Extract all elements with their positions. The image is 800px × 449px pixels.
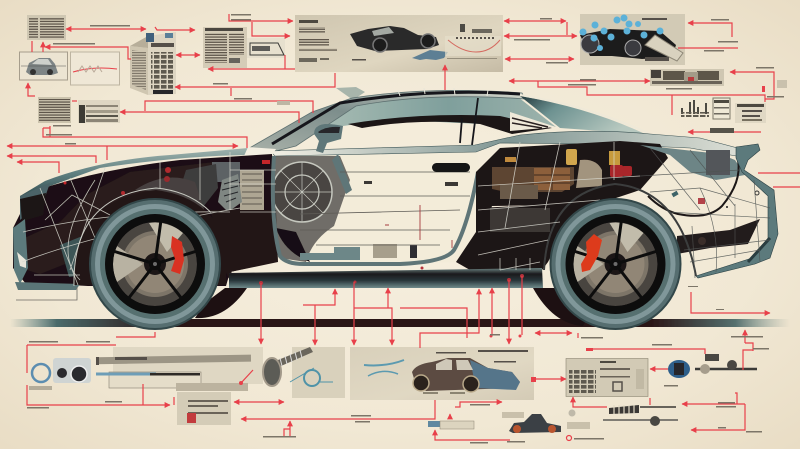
red brake caliper	[581, 234, 602, 272]
icon: small component row	[428, 410, 590, 433]
belt line and shoulder	[270, 131, 748, 158]
windshield and pillar	[246, 90, 525, 151]
dark belt band	[348, 115, 552, 134]
bottom arrows	[27, 332, 745, 440]
panel: top-left text sheet	[27, 15, 66, 40]
side glass	[316, 96, 556, 130]
cabin cream interior	[272, 145, 484, 264]
icon: dark car	[350, 26, 439, 52]
hood	[20, 148, 248, 199]
ground shadow	[10, 319, 790, 327]
rear wheel	[550, 199, 680, 329]
panel: car cutaway panel	[350, 347, 534, 400]
panel: small form	[176, 383, 248, 425]
right-of-front-wheel dark panel	[210, 210, 278, 272]
bottom-left: assembly icons	[29, 358, 91, 390]
rear compartment	[476, 141, 745, 250]
red component dots on sill	[259, 266, 524, 285]
top-left arrows	[7, 14, 335, 300]
rear light area	[677, 219, 760, 254]
door handle	[432, 163, 470, 172]
steering and cockpit	[271, 124, 352, 262]
roof and glass	[246, 87, 650, 151]
top-right arrows	[445, 21, 800, 313]
dark mid underbody	[456, 195, 612, 270]
red brake caliper	[171, 236, 184, 274]
sill	[229, 268, 543, 288]
wire frame lines	[22, 142, 640, 285]
door opening lower frame	[273, 156, 478, 264]
rear spoiler and tail edge	[696, 144, 778, 278]
lighter front mid	[20, 162, 215, 274]
fascia	[20, 183, 50, 220]
front wheel	[90, 199, 220, 329]
icon: axle assembly	[668, 354, 757, 378]
node dots	[239, 86, 765, 385]
panel: shaft diagram	[96, 347, 263, 388]
panel: curve chart	[70, 52, 120, 85]
cabin thin lines	[300, 172, 470, 245]
dark wire grid on rear body	[640, 148, 770, 278]
rear wheel arch	[544, 184, 696, 276]
panel: small text block left	[38, 97, 71, 123]
panel: stacked booklet	[130, 32, 176, 95]
panel: dash strip	[650, 69, 724, 86]
panel: spring assembly	[263, 347, 345, 398]
panel: airbag diagram with blue markers	[580, 14, 685, 65]
wing mirror	[314, 124, 343, 153]
under-car arrows	[261, 276, 753, 379]
b pillar	[460, 98, 478, 145]
front wheel arch	[74, 190, 232, 285]
roof flap	[336, 87, 365, 100]
panel: main top panel with car and graph	[295, 15, 503, 72]
panel: document with illustration	[203, 27, 285, 68]
panel: right gauges and lists	[681, 98, 766, 123]
panel: small car photo	[20, 52, 68, 80]
panel: grid form	[566, 358, 648, 396]
engine components	[60, 160, 270, 277]
panel: small bar chart left	[78, 100, 120, 123]
icon: spring strip and rod	[603, 405, 678, 426]
car: body	[13, 87, 778, 329]
car: far-side wheels	[195, 288, 595, 326]
rear quarter	[520, 96, 645, 134]
engine bay dark	[13, 154, 274, 286]
icon: cutaway sedan	[412, 358, 520, 392]
